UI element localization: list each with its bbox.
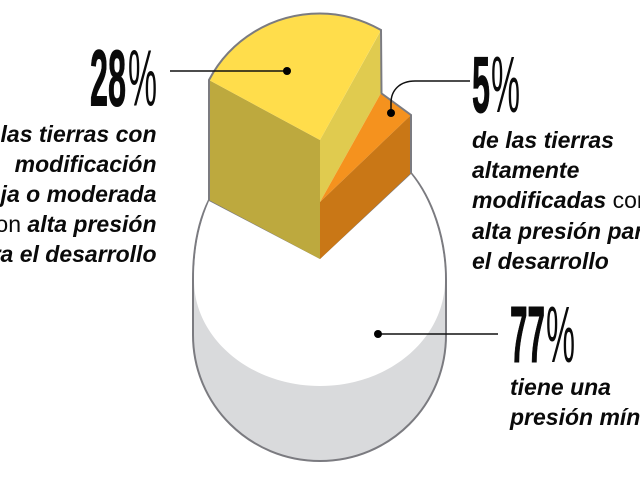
callout: 28%: % — [128, 34, 157, 122]
slice: 5% orange raised — [320, 93, 411, 259]
text block 5%: el desarrollo — [472, 248, 609, 274]
callout: 77% — [374, 290, 640, 430]
leader line 5% — [387, 81, 470, 117]
callout: 28% — [0, 34, 291, 267]
text block 5% — [472, 127, 640, 274]
text block 28% — [0, 121, 157, 267]
text block 5%: de las tierras — [472, 127, 614, 153]
callout: 5%: % — [491, 40, 520, 129]
text block 77% — [509, 374, 640, 430]
leader line 28% — [170, 67, 291, 75]
slice: 28% yellow raised — [209, 14, 382, 259]
text block 28%: modificación — [15, 151, 156, 177]
text block 77%: tiene una — [510, 374, 611, 400]
pie chart — [193, 14, 446, 461]
callout: 5% — [387, 40, 640, 274]
text block 5%: altamente — [472, 157, 580, 183]
slice: 77% white top — [194, 174, 445, 386]
number 77%: 77 — [510, 290, 545, 379]
number 28%: 28 — [90, 34, 126, 122]
leader line 77% — [374, 330, 498, 338]
base of pie: grey side wall — [193, 173, 446, 461]
callout: 77%: % — [546, 290, 575, 379]
number 5%: 5 — [472, 40, 490, 129]
